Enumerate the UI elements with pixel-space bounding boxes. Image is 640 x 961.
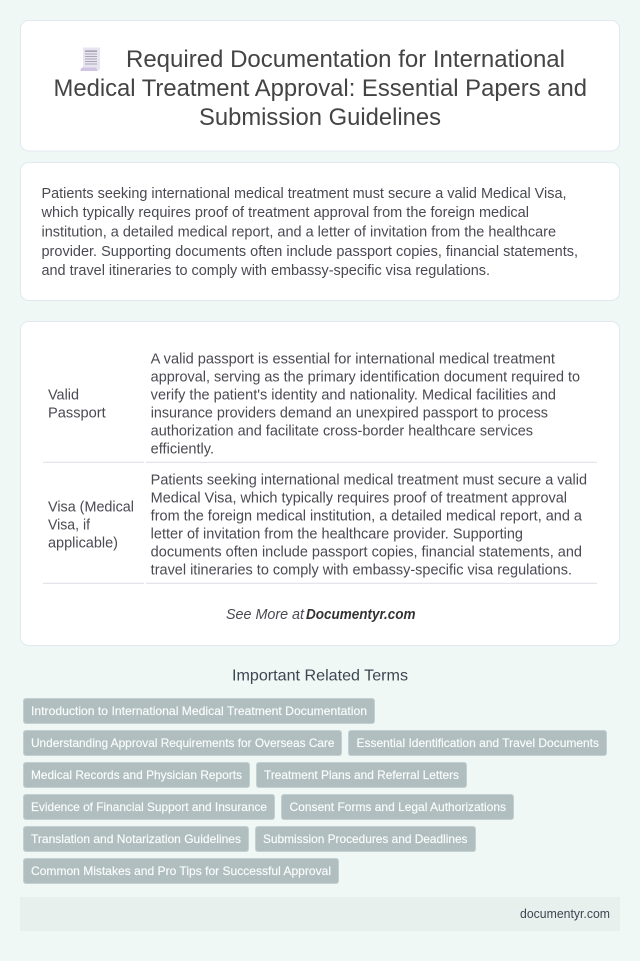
- table row: valid passport: efficiently.: [151, 441, 214, 457]
- tag: submission: Submission Procedures and Deadlines: [263, 832, 468, 846]
- tag: common mistakes: [24, 858, 338, 884]
- table row: valid passport: Passport: [48, 405, 106, 421]
- text block: introduction paragraph: which typically requires proof of treatment approval from the foreign medical: [40, 205, 529, 221]
- tag: translation: Translation and Notarization Guidelines: [31, 832, 241, 846]
- heading: title: [54, 46, 587, 131]
- tag: approval requirements: Understanding Approval Requirements for Overseas Care: [31, 736, 335, 750]
- tag: approval requirements: [24, 730, 342, 756]
- table row: medical visa: letter of invitation from the healthcare provider. Supporting: [151, 526, 523, 542]
- tag: common mistakes: Common Mistakes and Pro Tips for Successful Approval: [31, 864, 331, 878]
- heading: title: Medical Treatment Approval: Essential Papers and: [54, 75, 587, 102]
- tag: consent forms: [282, 794, 514, 820]
- tag: introduction: Introduction to International Medical Treatment Documentation: [31, 704, 367, 718]
- tag: translation: [24, 826, 248, 852]
- tag: medical records: Medical Records and Physician Reports: [31, 768, 242, 782]
- heading: title: Required Documentation for International: [126, 46, 565, 73]
- footer: [20, 897, 620, 931]
- table row: medical visa: from the foreign medical institution, a detailed medical report, and a: [151, 508, 582, 524]
- tag: consent forms: Consent Forms and Legal Authorizations: [290, 800, 506, 814]
- panel: introduction: [20, 162, 620, 300]
- text block: introduction paragraph: provider. Supporting documents often include passport copies, financial statements,: [42, 244, 578, 260]
- link: see more: [226, 607, 416, 623]
- table row: valid passport: insurance providers demand an unexpired passport to process: [151, 405, 548, 421]
- text block: introduction paragraph: and travel itineraries to comply with embassy-specific visa regulations.: [42, 263, 490, 279]
- panel: title card: [20, 20, 620, 151]
- tag: treatment plans: Treatment Plans and Referral Letters: [264, 768, 459, 782]
- panel: documents table: [20, 322, 620, 646]
- tag: identification documents: Essential Identification and Travel Documents: [356, 736, 599, 750]
- table row: medical visa: Medical Visa, which typically requires proof of treatment approval: [151, 490, 567, 506]
- table row: medical visa: travel itineraries to comply with embassy-specific visa regulations.: [151, 562, 572, 578]
- text block: introduction paragraph: Patients seeking international medical treatment must secure a valid Medical Visa,: [42, 186, 566, 202]
- tag: treatment plans: [256, 762, 466, 788]
- tag: submission: [256, 826, 476, 852]
- table row: medical visa: documents often include passport copies, financial statements, and: [151, 544, 582, 560]
- table row: valid passport: [43, 351, 597, 462]
- tag: financial support: Evidence of Financial Support and Insurance: [31, 800, 267, 814]
- tag list: related terms: [24, 698, 606, 884]
- table row: medical visa: Patients seeking international medical treatment must secure a valid: [151, 472, 587, 488]
- link: see more: See More at: [226, 607, 305, 623]
- tag: medical records: [24, 762, 250, 788]
- table row: valid passport: A valid passport is essential for international medical treatment: [151, 351, 555, 367]
- footer: documentyr.com: [520, 906, 610, 921]
- text block: introduction paragraph: institution, a detailed medical report, and a letter of invitation from the healthcare: [42, 224, 556, 240]
- table row: medical visa: Visa, if: [48, 517, 91, 533]
- tag: financial support: [24, 794, 274, 820]
- tag: introduction: [24, 698, 374, 724]
- text block: introduction paragraph: [40, 186, 578, 279]
- heading: title: Submission Guidelines: [199, 104, 441, 131]
- table row: medical visa: applicable): [48, 535, 118, 551]
- link: see more: Documentyr.com: [306, 607, 416, 623]
- tag: identification documents: [348, 730, 606, 756]
- table row: valid passport: verify the patient's identity and nationality. Medical facilities and: [151, 387, 556, 403]
- table row: valid passport: approval, serving as the primary identification document required to: [151, 369, 580, 385]
- table row: medical visa: [43, 472, 597, 583]
- table row: medical visa: Visa (Medical: [48, 499, 134, 515]
- table row: valid passport: authorization and facilitate cross-border healthcare services: [151, 423, 533, 439]
- table row: valid passport: Valid: [48, 387, 79, 403]
- heading: important related terms: Important Related Terms: [232, 668, 408, 685]
- icon: document scroll: [80, 48, 100, 71]
